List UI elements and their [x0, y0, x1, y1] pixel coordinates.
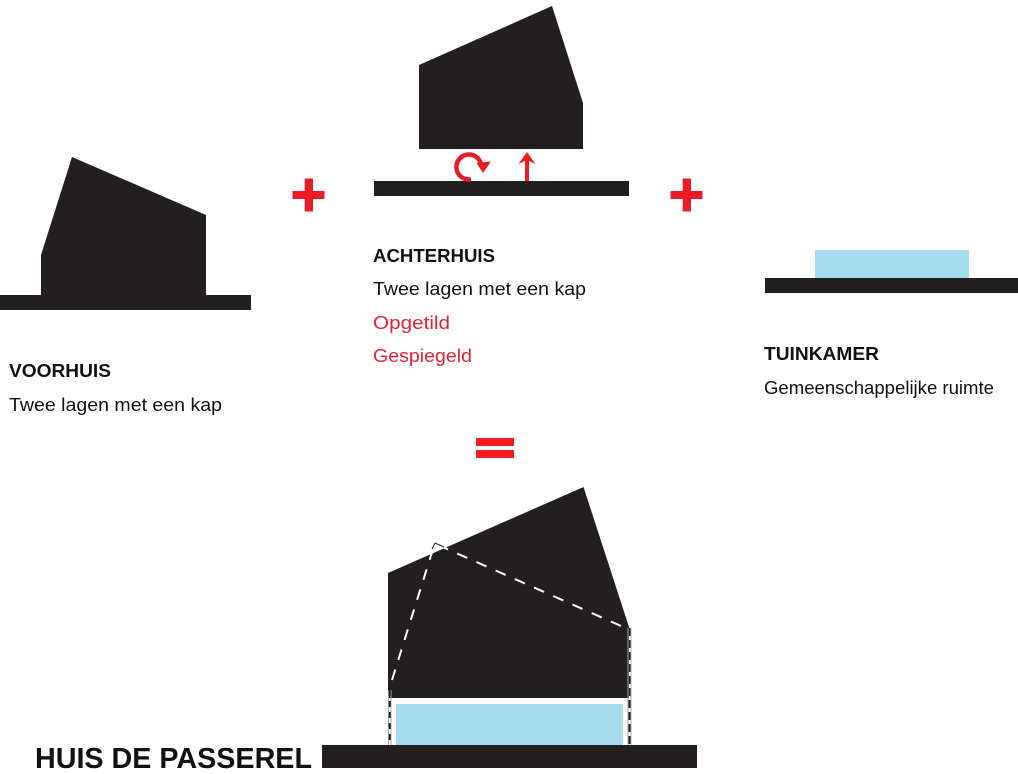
- tuinkamer diagram: [765, 250, 1018, 293]
- dashed outline of voorhuis: [388, 543, 631, 745]
- achterhuis label: Gespiegeld: [373, 346, 472, 366]
- tuinkamer label: [764, 344, 994, 398]
- voorhuis label: Twee lagen met een kap: [9, 395, 222, 415]
- voorhuis diagram: [0, 157, 251, 310]
- tuinkamer label: TUINKAMER: [764, 344, 879, 364]
- achterhuis label: ACHTERHUIS: [373, 246, 495, 266]
- equals sign: [476, 438, 514, 458]
- achterhuis label: Twee lagen met een kap: [373, 279, 586, 299]
- plus sign 1: [292, 178, 324, 212]
- tuinkamer label: Gemeenschappelijke ruimte: [764, 378, 994, 398]
- voorhuis label: [9, 361, 222, 415]
- icon: up arrow: [518, 152, 536, 181]
- icon: rotate arrow: [456, 155, 491, 180]
- plus sign 2: [670, 178, 702, 212]
- achterhuis diagram: [374, 6, 629, 196]
- voorhuis label: VOORHUIS: [9, 361, 111, 381]
- achterhuis label: [373, 246, 586, 366]
- huis de passerel diagram: [322, 487, 697, 768]
- achterhuis label: Opgetild: [373, 313, 450, 333]
